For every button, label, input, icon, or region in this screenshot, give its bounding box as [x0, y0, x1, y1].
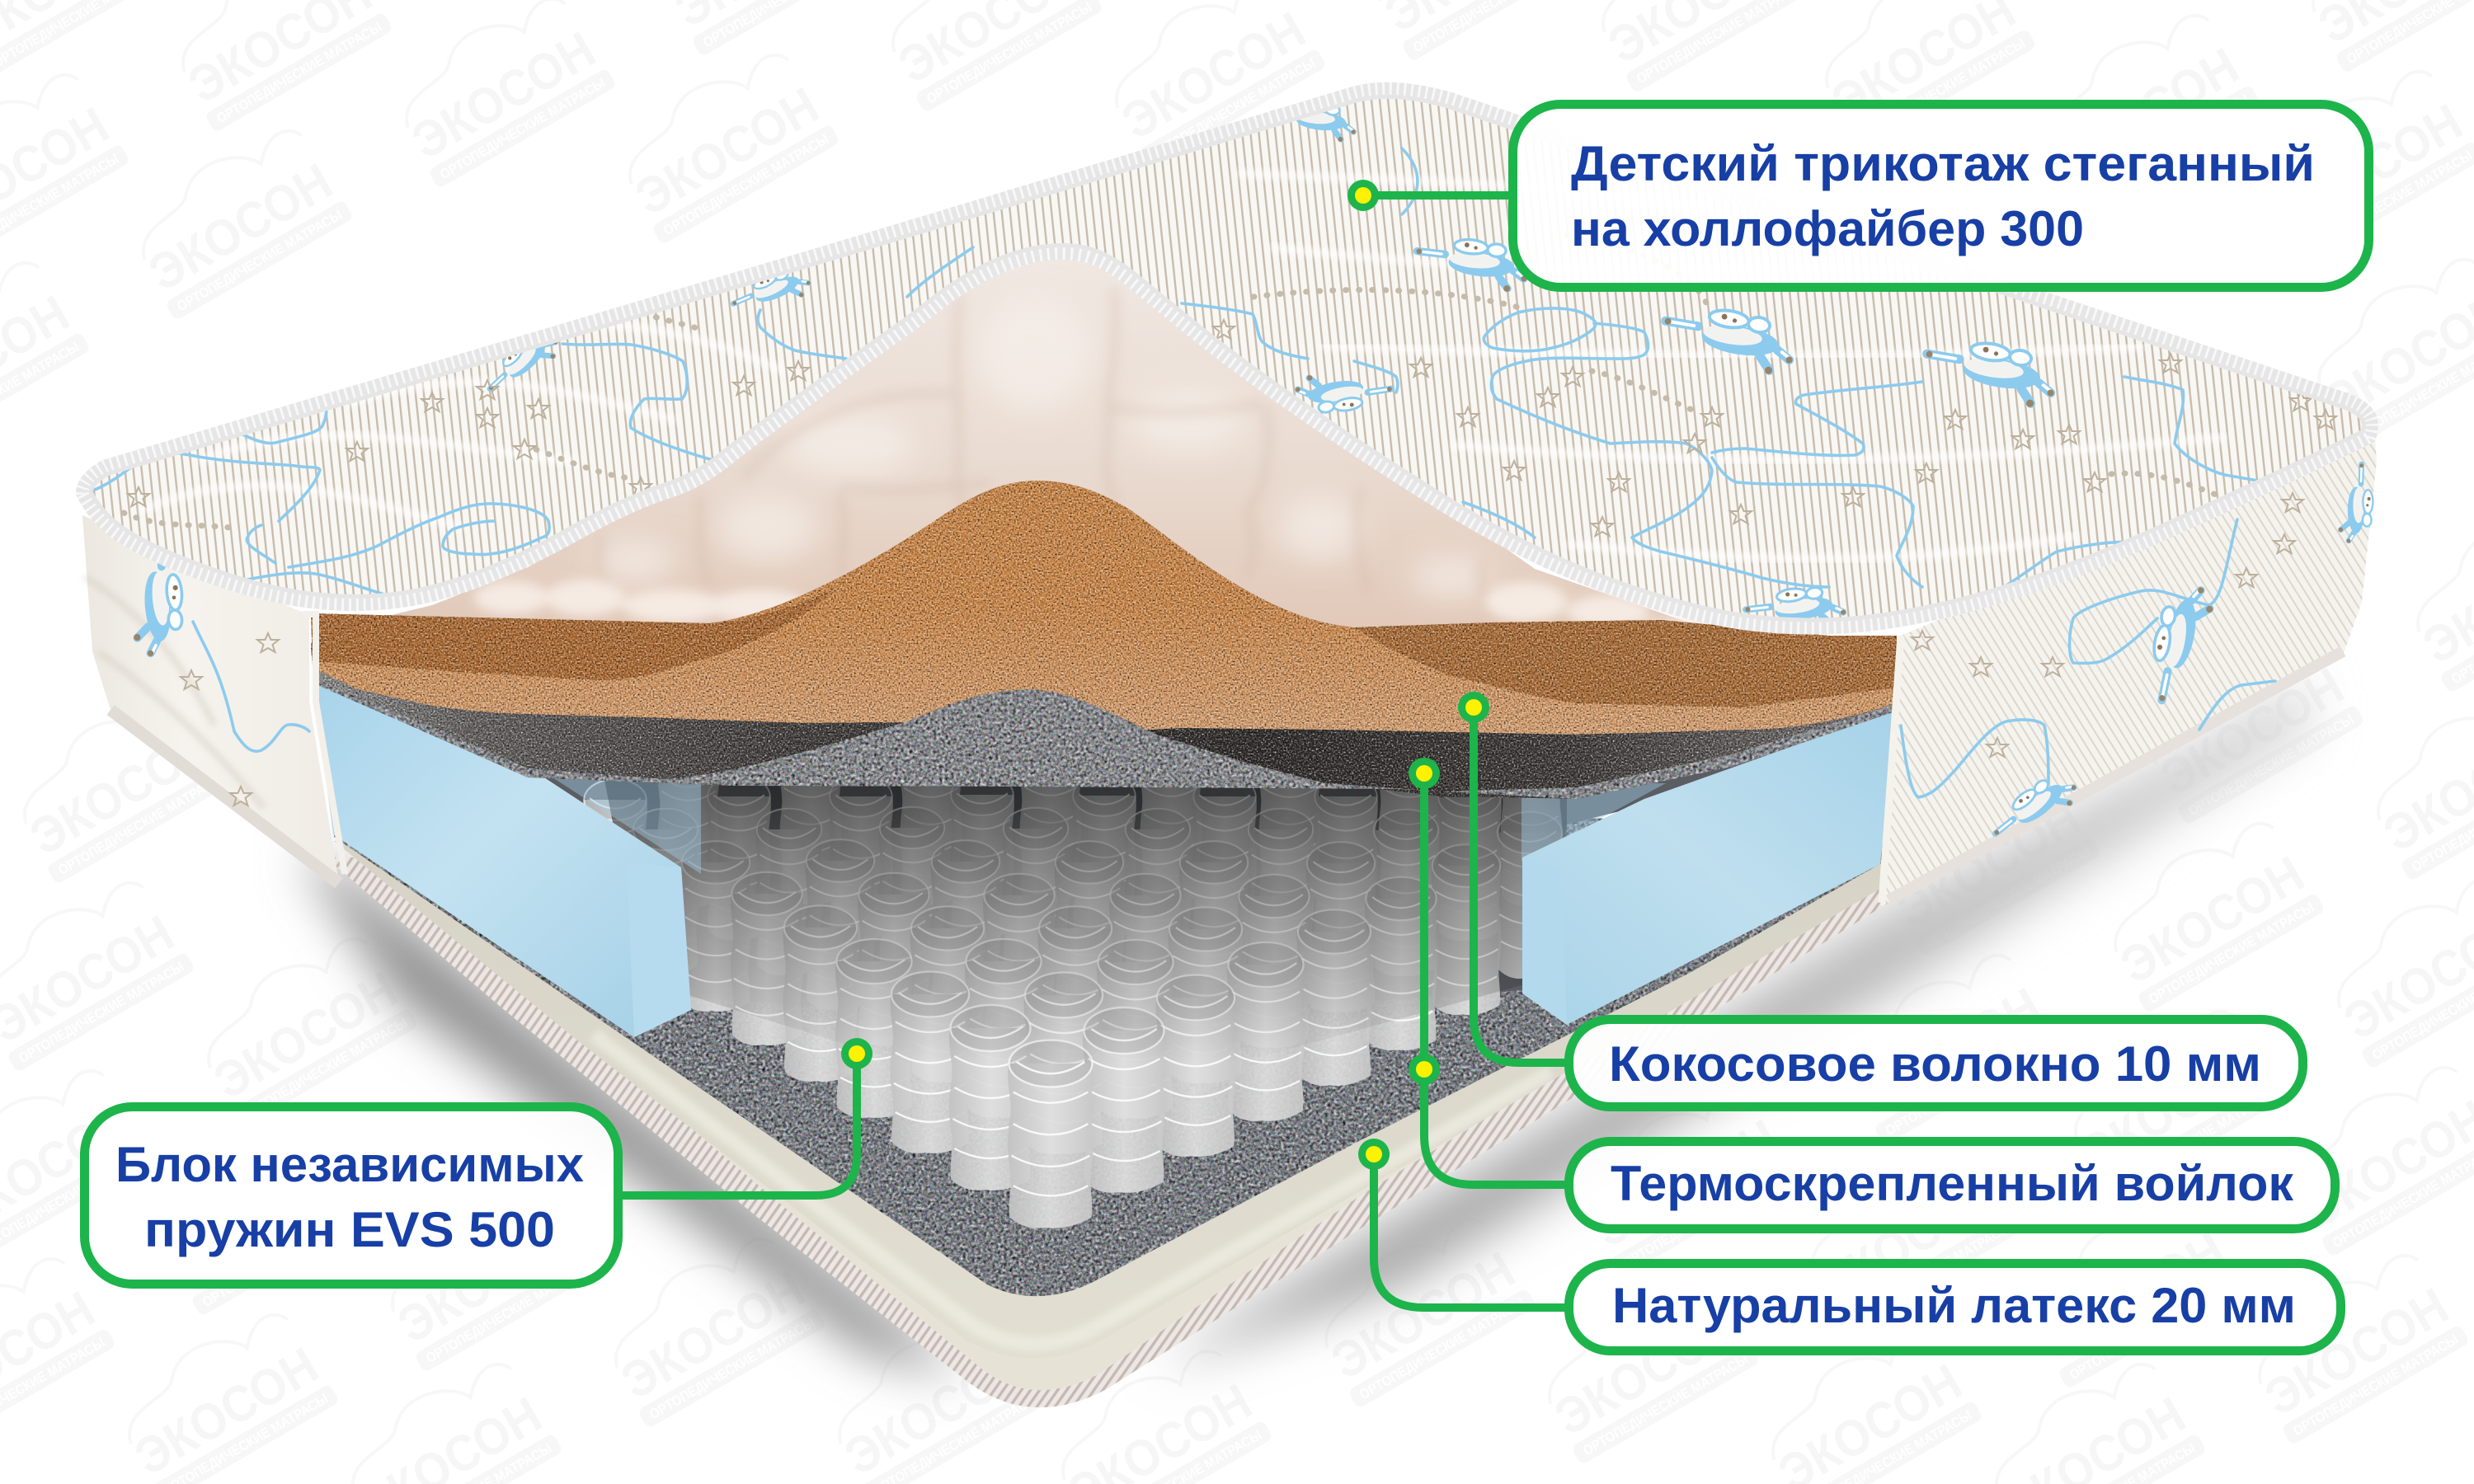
watermark pattern: ОРТОПЕДИЧЕСКИЕ МАТРАСЫ	[239, 1015, 410, 1122]
bubble trails	[122, 287, 2217, 531]
watermark pattern: ОРТОПЕДИЧЕСКИЕ МАТРАСЫ	[2146, 899, 2316, 1007]
coconut fibre layer	[311, 481, 1897, 735]
watermark pattern: ЭКОСОН	[402, 21, 604, 171]
felt underside	[311, 627, 1897, 799]
watermark pattern: ЭКОСОН	[1848, 978, 2050, 1127]
watermark pattern: ЭКОСОН	[2255, 1278, 2458, 1427]
watermark pattern: ОРТОПЕДИЧЕСКИЕ МАТРАСЫ	[1883, 1031, 2053, 1139]
watermark pattern: ЭКОСОН	[1585, 1110, 1787, 1259]
knit edge band	[326, 857, 1888, 1407]
callout: coconut fibre	[1569, 1019, 2302, 1106]
watermark pattern: ОРТОПЕДИЧЕСКИЕ МАТРАСЫ	[423, 1259, 594, 1366]
callout: knit cover: на холлофайбер 300	[1571, 201, 2084, 256]
left side panel	[82, 515, 345, 883]
watermark pattern: ОРТОПЕДИЧЕСКИЕ МАТРАСЫ	[661, 131, 831, 238]
watermark pattern: ЭКОСОН	[388, 1205, 590, 1355]
watermark pattern: ЭКОСОН	[2046, 38, 2248, 187]
watermark pattern: ОРТОПЕДИЧЕСКИЕ МАТРАСЫ	[174, 207, 345, 314]
blue foam block right	[1522, 709, 1897, 1025]
knitted top cover with sheep print	[76, 82, 2378, 638]
watermark pattern: ОРТОПЕДИЧЕСКИЕ МАТРАСЫ	[2185, 711, 2356, 819]
leader: felt	[1409, 758, 1569, 1185]
watermark pattern: ЭКОСОН	[125, 1337, 327, 1484]
leader: spring block	[618, 1038, 872, 1195]
watermark pattern: ЭКОСОН	[2032, 1222, 2234, 1371]
watermark pattern: ЭКОСОН	[2151, 658, 2353, 807]
leader: knit cover	[1348, 180, 1512, 211]
callout: latex	[1569, 1263, 2340, 1350]
leader: coconut fibre	[1458, 692, 1569, 1063]
watermark pattern: ЭКОСОН	[2111, 846, 2313, 995]
callout: knit cover	[1512, 104, 2368, 287]
watermark pattern: ЭКОСОН	[21, 717, 223, 866]
thermobonded felt lifted	[316, 681, 1893, 799]
watermark pattern: ОРТОПЕДИЧЕСКИЕ МАТРАСЫ	[1147, 55, 1318, 162]
cover piping	[76, 82, 2378, 635]
felt floor	[334, 791, 1884, 1296]
watermark pattern: ОРТОПЕДИЧЕСКИЕ МАТРАСЫ	[1357, 1295, 1527, 1402]
watermark pattern: ЭКОСОН	[626, 77, 828, 227]
watermark pattern: ОРТОПЕДИЧЕСКИЕ МАТРАСЫ	[1843, 1219, 2014, 1327]
watermark pattern: ЭКОСОН	[165, 1149, 367, 1298]
watermark pattern: ЭКОСОН	[205, 961, 407, 1111]
quilting waves	[140, 173, 2227, 559]
watermark pattern: ЭКОСОН	[1808, 1166, 2011, 1315]
callout: spring block: пружин EVS 500	[144, 1202, 555, 1257]
watermark pattern: ОРТОПЕДИЧЕСКИЕ МАТРАСЫ	[16, 959, 186, 1066]
watermark pattern: ЭКОСОН	[835, 1337, 1037, 1484]
watermark pattern: ЭКОСОН	[612, 1261, 814, 1411]
watermark pattern: ЭКОСОН	[1545, 1298, 1747, 1447]
right side panel	[1880, 437, 2377, 907]
dark backing behind springs	[495, 693, 1897, 1022]
callout: latex: Натуральный латекс 20 мм	[1612, 1278, 2296, 1333]
sheep prints	[482, 98, 2059, 638]
pocket spring block	[536, 742, 1666, 1228]
watermark pattern: ЭКОСОН	[1888, 790, 2090, 939]
callout: felt: Термоскрепленный войлок	[1611, 1156, 2294, 1211]
watermark pattern: ЭКОСОН	[1322, 1242, 1524, 1391]
lower latex layer	[528, 841, 1884, 1390]
watermark pattern: ОРТОПЕДИЧЕСКИЕ МАТРАСЫ	[200, 1203, 370, 1310]
watermark pattern: ОРТОПЕДИЧЕСКИЕ МАТРАСЫ	[1922, 843, 2093, 951]
watermark pattern: ОРТОПЕДИЧЕСКИЕ МАТРАСЫ	[437, 75, 608, 182]
callout: coconut fibre: Кокосовое волокно 10 мм	[1609, 1036, 2261, 1092]
watermark pattern: ЭКОСОН	[2072, 1034, 2274, 1183]
leader: latex	[1358, 1139, 1569, 1308]
callout: felt	[1569, 1141, 2335, 1228]
blue foam block left	[313, 678, 691, 1037]
callout: spring block: Блок независимых	[115, 1137, 584, 1192]
watermark pattern: ОРТОПЕДИЧЕСКИЕ МАТРАСЫ	[647, 1315, 817, 1422]
shadow under mattress	[297, 684, 2309, 1377]
watermark pattern: ОРТОПЕДИЧЕСКИЕ МАТРАСЫ	[2081, 92, 2251, 199]
star prints	[128, 320, 2336, 536]
watermark pattern: ОРТОПЕДИЧЕСКИЕ МАТРАСЫ	[214, 19, 384, 126]
natural latex upper layer	[334, 841, 1884, 1359]
watermark pattern: ОРТОПЕДИЧЕСКИЕ МАТРАСЫ	[1620, 1163, 1790, 1270]
watermark pattern: ОРТОПЕДИЧЕСКИЕ МАТРАСЫ	[1580, 1351, 1751, 1458]
callout: spring block	[84, 1106, 618, 1284]
callout: knit cover: Детский трикотаж стеганный	[1571, 136, 2315, 191]
watermark pattern: ОРТОПЕДИЧЕСКИЕ МАТРАСЫ	[55, 771, 226, 878]
blue thread lines	[91, 148, 2267, 594]
watermark pattern: ОРТОПЕДИЧЕСКИЕ МАТРАСЫ	[2067, 1275, 2237, 1383]
quilted white hollofiber filling	[344, 249, 1773, 660]
watermark pattern: ЭКОСОН	[139, 153, 341, 303]
watermark pattern: ОРТОПЕДИЧЕСКИЕ МАТРАСЫ	[1857, 35, 2028, 143]
watermark pattern: ОРТОПЕДИЧЕСКИЕ МАТРАСЫ	[2106, 1087, 2277, 1195]
